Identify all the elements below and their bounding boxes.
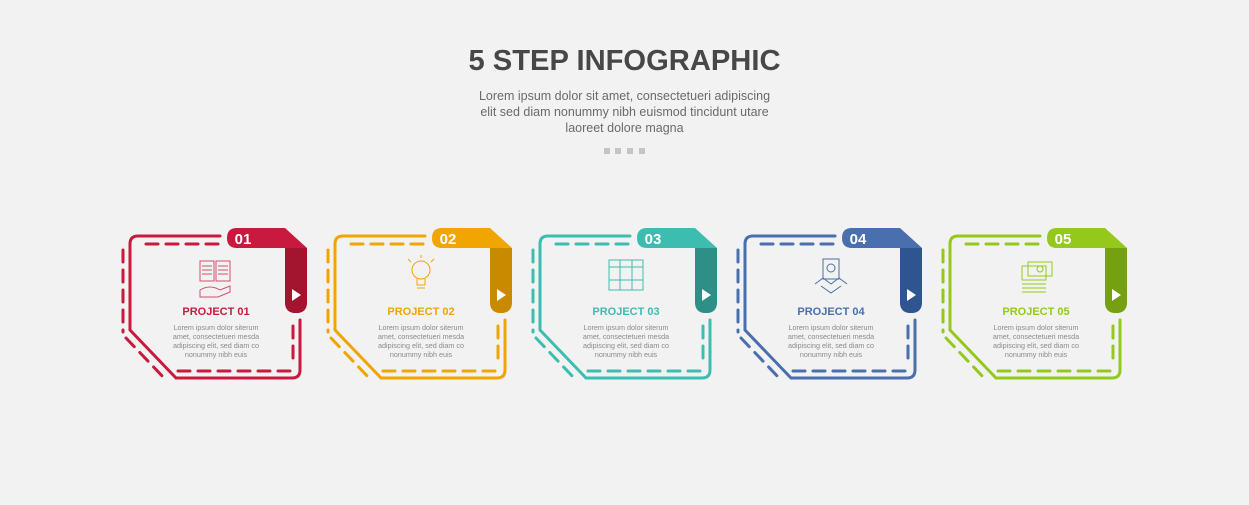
text 04: nonummy nibh euis bbox=[800, 350, 863, 359]
icon: bulb bbox=[408, 255, 434, 288]
text 03 bbox=[583, 323, 669, 359]
tab 05 bbox=[1047, 228, 1127, 313]
tab 02: 02 bbox=[440, 231, 456, 248]
tab 05: 05 bbox=[1055, 231, 1071, 248]
text 01: nonummy nibh euis bbox=[185, 350, 248, 359]
text 03: amet, consectetueri mesda bbox=[583, 332, 669, 341]
icon: blueprint bbox=[609, 260, 643, 290]
text 01: amet, consectetueri mesda bbox=[173, 332, 259, 341]
text 04: amet, consectetueri mesda bbox=[788, 332, 874, 341]
text 05: amet, consectetueri mesda bbox=[993, 332, 1079, 341]
text 05 bbox=[993, 323, 1079, 359]
text 04: adipiscing elit, sed diam co bbox=[788, 341, 874, 350]
text 03: Lorem ipsum dolor siterum bbox=[583, 323, 669, 332]
text 02: amet, consectetueri mesda bbox=[378, 332, 464, 341]
card 01 bbox=[123, 228, 307, 380]
tab 01: 01 bbox=[235, 231, 251, 248]
text 05: nonummy nibh euis bbox=[1005, 350, 1068, 359]
text 01 bbox=[173, 323, 259, 359]
subtitle bbox=[479, 89, 770, 135]
heading 04: PROJECT 04 bbox=[797, 306, 866, 318]
text 02 bbox=[378, 323, 464, 359]
text 01: adipiscing elit, sed diam co bbox=[173, 341, 259, 350]
text 03: adipiscing elit, sed diam co bbox=[583, 341, 669, 350]
text 02: Lorem ipsum dolor siterum bbox=[378, 323, 464, 332]
tab 01 bbox=[227, 228, 307, 313]
subtitle: elit sed diam nonummy nibh euismod tincidunt utare bbox=[480, 105, 769, 119]
card 05 bbox=[943, 228, 1127, 380]
card 02 bbox=[328, 228, 512, 380]
heading 01: PROJECT 01 bbox=[182, 306, 250, 318]
heading 05: PROJECT 05 bbox=[1002, 306, 1070, 318]
title: 5 STEP INFOGRAPHIC bbox=[468, 45, 781, 77]
heading 03: PROJECT 03 bbox=[592, 306, 660, 318]
dots divider bbox=[604, 148, 645, 154]
tab 03: 03 bbox=[645, 231, 661, 248]
card 03 bbox=[533, 228, 717, 380]
tab 03 bbox=[637, 228, 717, 313]
icon: book in hand bbox=[200, 261, 230, 297]
text 04 bbox=[788, 323, 874, 359]
heading 02: PROJECT 02 bbox=[387, 306, 455, 318]
text 05: adipiscing elit, sed diam co bbox=[993, 341, 1079, 350]
subtitle: Lorem ipsum dolor sit amet, consectetueri adipiscing bbox=[479, 89, 770, 103]
text 04: Lorem ipsum dolor siterum bbox=[788, 323, 874, 332]
text 03: nonummy nibh euis bbox=[595, 350, 658, 359]
text 02: adipiscing elit, sed diam co bbox=[378, 341, 464, 350]
tab 02 bbox=[432, 228, 512, 313]
tab 04: 04 bbox=[850, 231, 867, 248]
subtitle: laoreet dolore magna bbox=[565, 121, 684, 135]
text 01: Lorem ipsum dolor siterum bbox=[173, 323, 259, 332]
tab 04 bbox=[842, 228, 922, 313]
icon: money stack bbox=[1022, 262, 1052, 292]
text 02: nonummy nibh euis bbox=[390, 350, 453, 359]
icon: handshake bbox=[815, 259, 847, 293]
text 05: Lorem ipsum dolor siterum bbox=[993, 323, 1079, 332]
card 04 bbox=[738, 228, 922, 380]
